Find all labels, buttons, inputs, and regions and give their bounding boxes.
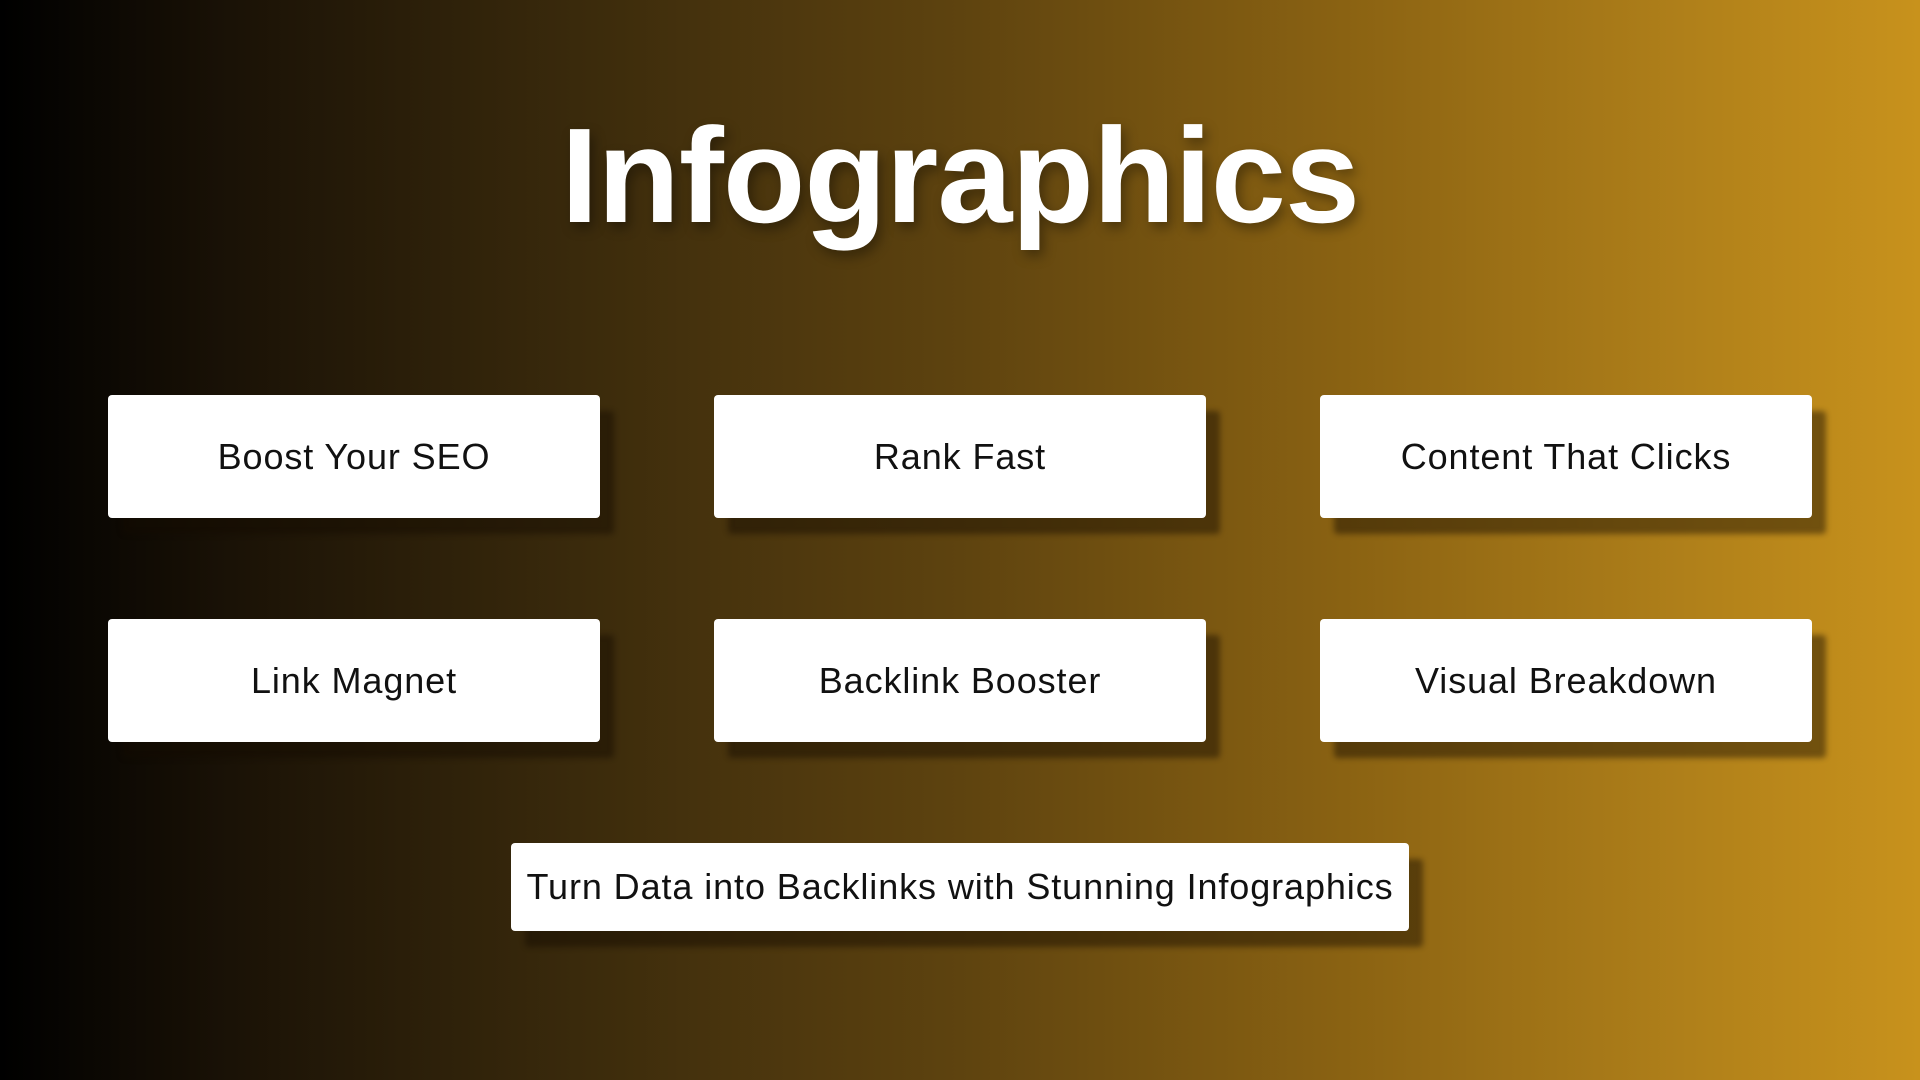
card: Rank Fast	[714, 395, 1206, 518]
card: Backlink Booster	[714, 619, 1206, 742]
card: Rank Fast: Rank Fast	[874, 436, 1046, 476]
title: Infographics	[561, 100, 1359, 251]
banner: tagline	[511, 843, 1409, 931]
card: Content That Clicks: Content That Clicks	[1401, 436, 1731, 476]
card: Backlink Booster: Backlink Booster	[819, 660, 1101, 700]
card: Link Magnet	[108, 619, 600, 742]
card: Boost Your SEO: Boost Your SEO	[218, 436, 490, 476]
card: Link Magnet: Link Magnet	[251, 660, 457, 700]
card: Visual Breakdown: Visual Breakdown	[1415, 660, 1717, 700]
banner: tagline: Turn Data into Backlinks with Stunning Infographics	[526, 866, 1394, 907]
card: Visual Breakdown	[1320, 619, 1812, 742]
card: Content That Clicks	[1320, 395, 1812, 518]
card: Boost Your SEO	[108, 395, 600, 518]
